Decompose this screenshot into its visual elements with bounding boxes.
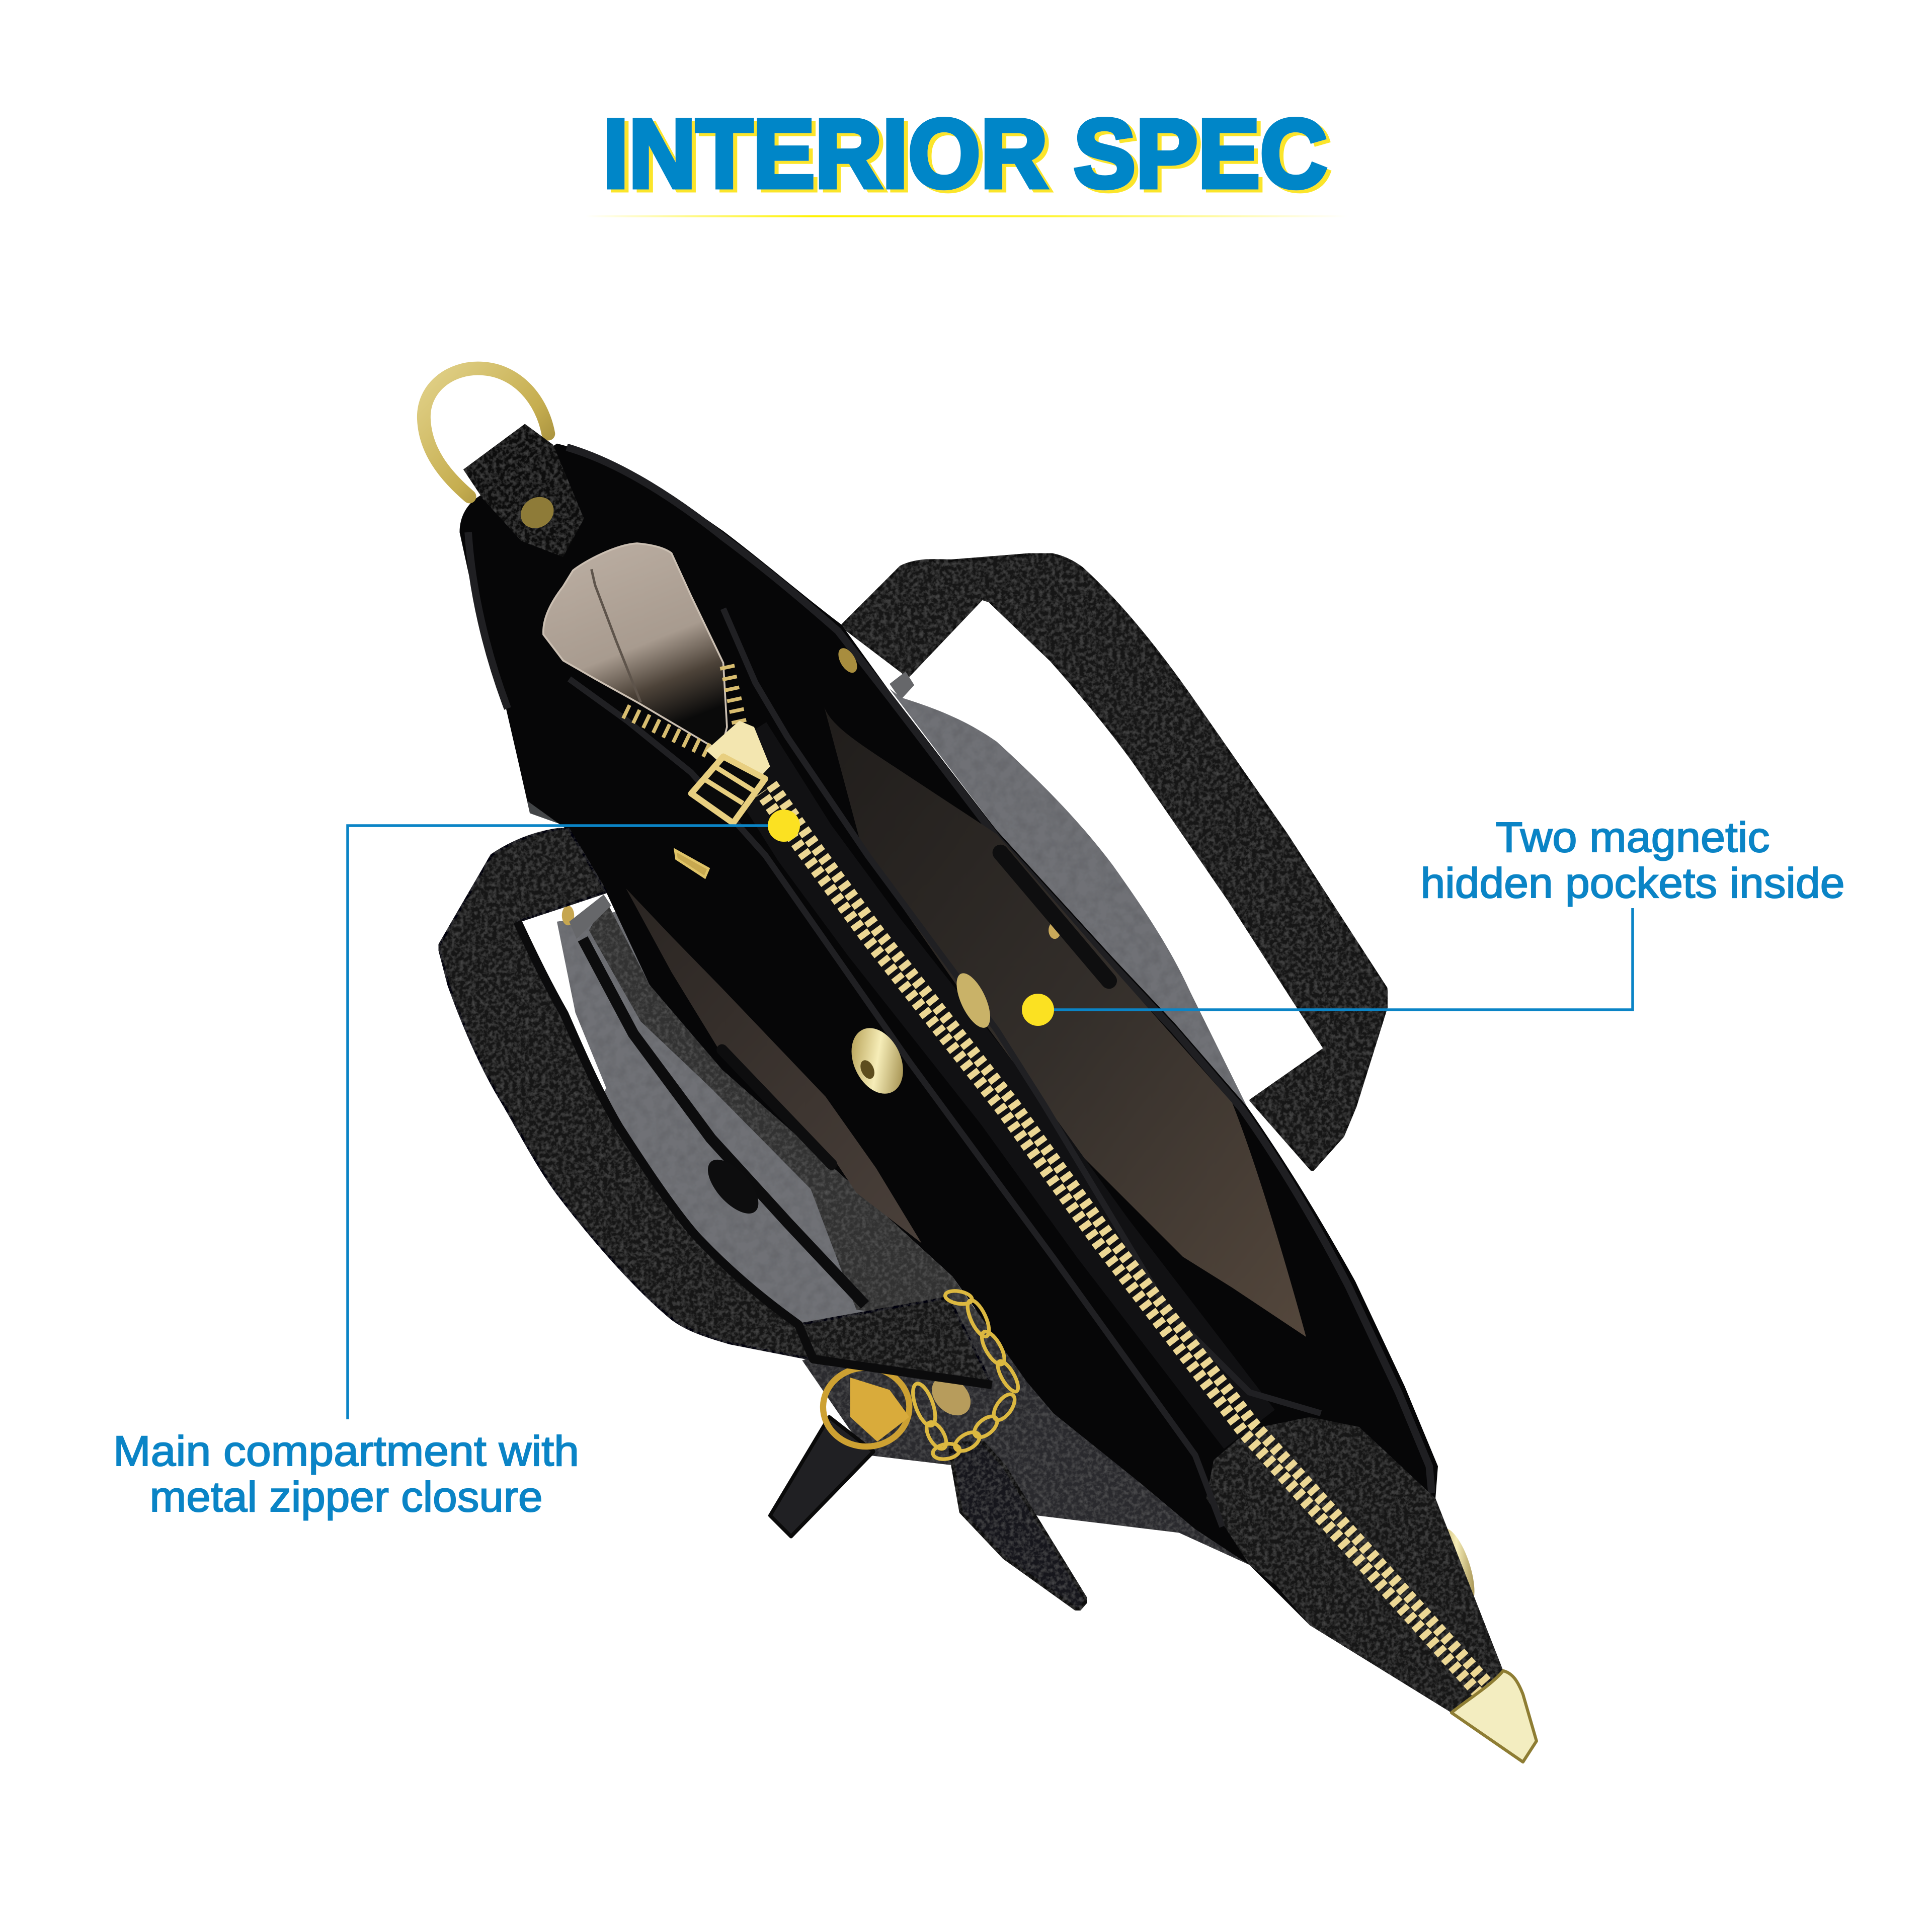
back handle (842, 553, 1388, 1171)
marker dot: main compartment (768, 810, 800, 842)
main black body (459, 444, 1503, 1713)
left outer gray panel (557, 912, 936, 1325)
small gold stud (1049, 922, 1061, 939)
callout: hidden pockets: hidden pockets inside (1421, 859, 1844, 907)
title underline (585, 215, 1348, 217)
gold charm ring (823, 1367, 909, 1446)
callout: hidden pockets (1421, 814, 1844, 907)
hanging strap left (770, 1417, 873, 1537)
woven tape end (1206, 1417, 1503, 1713)
left inner leather band (589, 901, 986, 1325)
front handle gold stud (562, 906, 574, 925)
beige top pocket (543, 543, 727, 752)
zipper slider (691, 721, 770, 823)
oval hole (699, 1151, 767, 1222)
outer rim highlight (468, 447, 1432, 1493)
back handle gray tab (890, 672, 914, 700)
gold chain (909, 1289, 1022, 1461)
gold rivet under tape (1366, 1620, 1406, 1657)
product photo: handbag interior (424, 368, 1537, 1762)
leader line: hidden pockets (1038, 908, 1633, 1010)
open zipper teeth left (625, 711, 714, 754)
front handle inner edge (518, 922, 992, 1385)
callout: main compartment: metal zipper closure (150, 1473, 542, 1520)
title: INTERIOR SPEC (603, 99, 1327, 208)
compartment line upper (723, 609, 1321, 1413)
zipper teeth (761, 784, 1490, 1695)
left brown pocket lining (626, 889, 922, 1243)
upper left side strip (507, 708, 582, 832)
right pocket slot (1001, 853, 1109, 981)
D-ring (424, 368, 548, 497)
callout: main compartment (113, 1427, 579, 1520)
gold rivet (842, 1020, 913, 1102)
brass snap (515, 491, 560, 535)
back handle gold stud (835, 645, 861, 676)
left slot (722, 1050, 832, 1164)
pocket seam (592, 569, 640, 702)
leader line: main compartment (348, 826, 784, 1419)
front handle (439, 828, 992, 1385)
hanging strap right (949, 1441, 1087, 1611)
left dark rim line (583, 939, 865, 1305)
gold side ring (1431, 1524, 1482, 1610)
right outer gray panel (890, 689, 1247, 1106)
compartment line lower (569, 679, 1222, 1526)
callout: main compartment: Main compartment with (113, 1427, 579, 1475)
gold eyelet (950, 969, 997, 1032)
lower bag body (802, 1306, 1249, 1565)
right brown pocket lining (824, 707, 1306, 1337)
gold disc (924, 1369, 978, 1423)
marker dot: hidden pockets (1022, 994, 1054, 1026)
leather loop tab (463, 424, 584, 557)
gold charm lock (850, 1378, 909, 1441)
metal zipper end cap (1452, 1671, 1537, 1762)
gold clip (675, 850, 708, 877)
front handle gray tab (569, 895, 611, 939)
callout: hidden pockets: Two magnetic (1495, 814, 1770, 861)
zipper tape (739, 739, 1249, 1429)
open zipper teeth right (727, 665, 742, 735)
